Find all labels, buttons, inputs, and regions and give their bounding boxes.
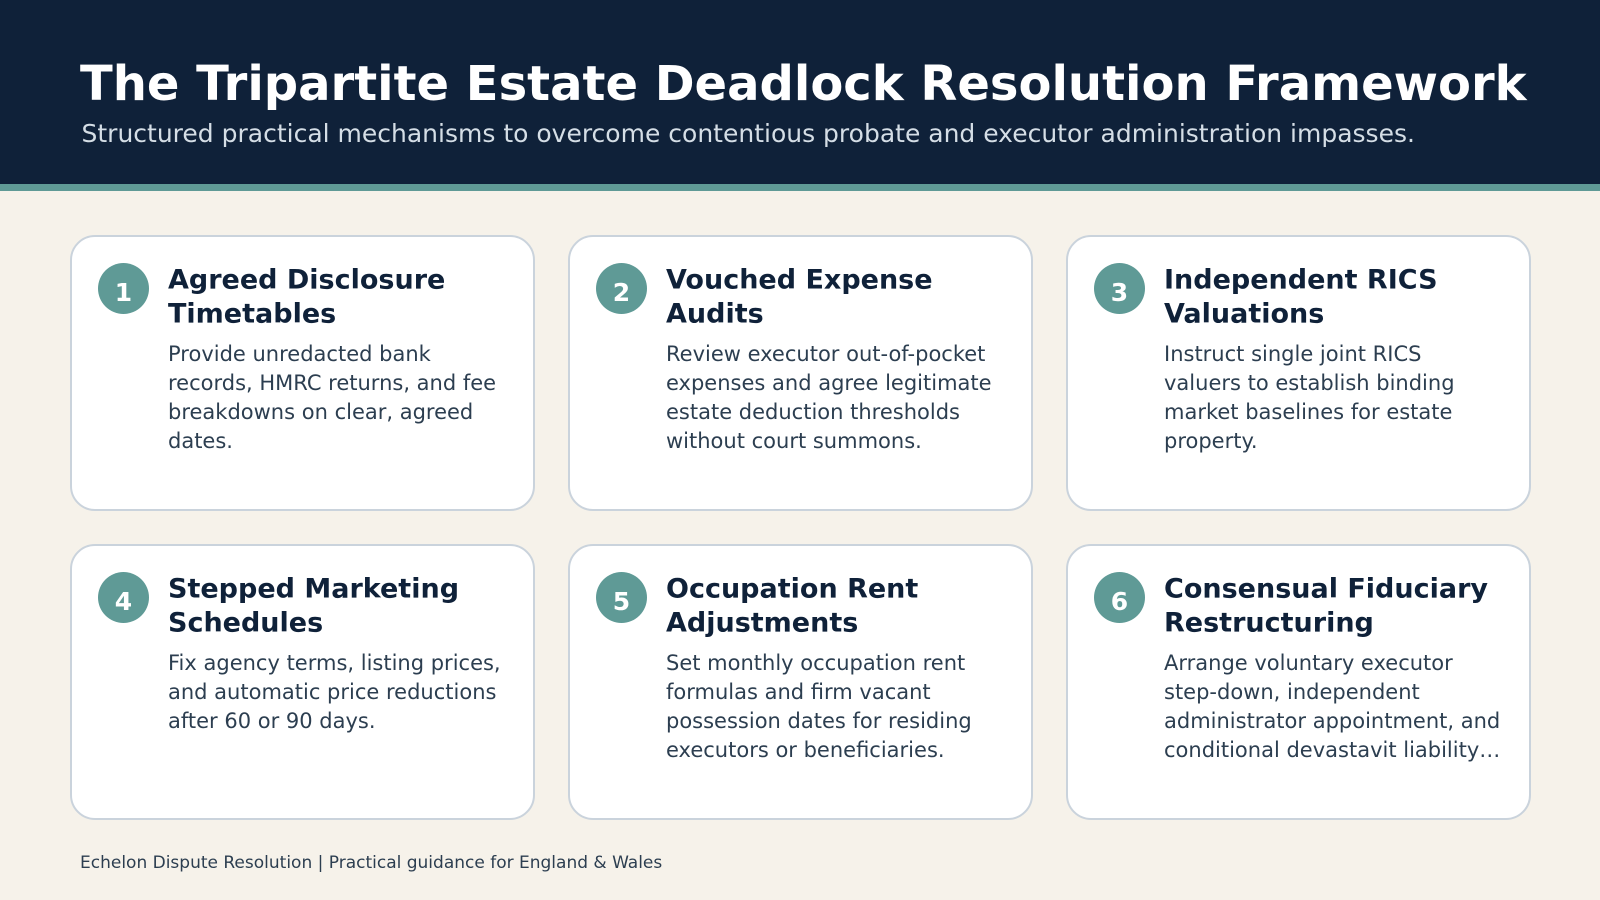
text: card 5: formulas and firm vacant bbox=[666, 680, 931, 704]
text: card 6: administrator appointment, and bbox=[1164, 709, 1500, 733]
icon: number 1: 1 bbox=[115, 278, 132, 307]
heading: card 4: Schedules bbox=[168, 608, 323, 638]
text: card 3: valuers to establish binding bbox=[1164, 371, 1455, 395]
subtitle: Structured practical mechanisms to overcome contentious probate and executor administration impasses. bbox=[82, 119, 1415, 148]
text: card 2: expenses and agree legitimate bbox=[666, 371, 992, 395]
heading: card 4: Stepped Marketing bbox=[168, 574, 459, 604]
icon: number 1 bbox=[98, 263, 149, 314]
panel: card 3 bbox=[1067, 236, 1530, 510]
heading: card 2: Audits bbox=[666, 298, 764, 330]
heading: card 2: Vouched Expense bbox=[666, 264, 933, 296]
text: card 6: step-down, independent bbox=[1164, 680, 1420, 704]
header banner bbox=[0, 0, 1600, 191]
text: card 3: property. bbox=[1164, 429, 1258, 453]
text: card 3: market baselines for estate bbox=[1164, 400, 1452, 424]
title: The Tripartite Estate Deadlock Resolution Framework bbox=[80, 56, 1528, 112]
heading: card 1: Agreed Disclosure bbox=[168, 264, 445, 296]
text: card 2: without court summons. bbox=[666, 429, 922, 453]
icon: number 2: 2 bbox=[613, 278, 630, 307]
text: card 1: records, HMRC returns, and fee bbox=[168, 371, 496, 395]
text: card 1: breakdowns on clear, agreed bbox=[168, 400, 473, 424]
icon: number 4 bbox=[98, 572, 149, 623]
heading: card 3: Independent RICS bbox=[1164, 264, 1438, 296]
panel: card 6 bbox=[1067, 545, 1530, 819]
heading: card 5: Occupation Rent bbox=[666, 574, 918, 604]
text: card 1: Provide unredacted bank bbox=[168, 342, 432, 366]
panel: card 4 bbox=[71, 545, 534, 819]
icon: number 5 bbox=[596, 572, 647, 623]
text: card 2: estate deduction thresholds bbox=[666, 400, 960, 424]
panel: card 1 bbox=[71, 236, 534, 510]
text: card 5: Set monthly occupation rent bbox=[666, 651, 965, 675]
icon: number 4: 4 bbox=[115, 587, 132, 616]
text: card 5: executors or beneficiaries. bbox=[666, 738, 945, 762]
icon: number 6: 6 bbox=[1111, 587, 1128, 616]
text: card 3: Instruct single joint RICS bbox=[1164, 342, 1421, 366]
text: card 4: and automatic price reductions bbox=[168, 680, 496, 704]
icon: number 2 bbox=[596, 263, 647, 314]
text: card 6: conditional devastavit liability… bbox=[1164, 738, 1500, 762]
heading: card 3: Valuations bbox=[1164, 298, 1324, 330]
icon: number 6 bbox=[1094, 572, 1145, 623]
text: card 4: Fix agency terms, listing prices, bbox=[168, 651, 501, 675]
heading: card 5: Adjustments bbox=[666, 608, 858, 638]
panel: card 5 bbox=[569, 545, 1032, 819]
icon: number 5: 5 bbox=[613, 587, 630, 616]
text: card 6: Arrange voluntary executor bbox=[1164, 651, 1453, 675]
icon: number 3: 3 bbox=[1111, 278, 1128, 307]
icon: number 3 bbox=[1094, 263, 1145, 314]
text: card 2: Review executor out-of-pocket bbox=[666, 342, 985, 366]
panel: card 2 bbox=[569, 236, 1032, 510]
text: card 5: possession dates for residing bbox=[666, 709, 972, 733]
heading: card 1: Timetables bbox=[168, 298, 336, 330]
text: card 4: after 60 or 90 days. bbox=[168, 709, 376, 733]
heading: card 6: Restructuring bbox=[1164, 608, 1374, 638]
text: card 1: dates. bbox=[168, 429, 233, 453]
heading: card 6: Consensual Fiduciary bbox=[1164, 574, 1488, 604]
footer: Echelon Dispute Resolution | Practical guidance for England & Wales bbox=[80, 853, 662, 873]
